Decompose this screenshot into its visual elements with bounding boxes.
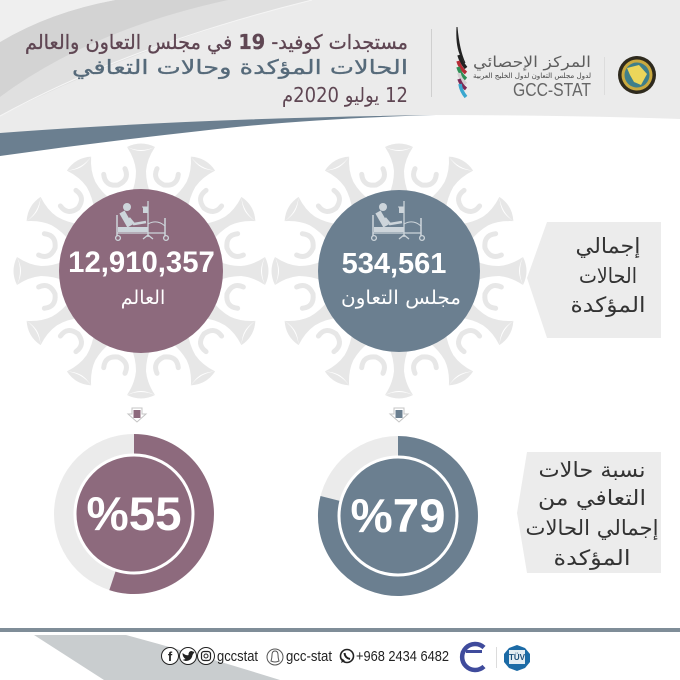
logo subtitle: لدول مجلس التعاون لدول الخليج العربية bbox=[473, 72, 591, 80]
panel: total confirmed cases, GCC bbox=[318, 190, 480, 352]
footer badge divider bbox=[496, 647, 497, 668]
header blue swoosh bbox=[0, 115, 436, 156]
logo GCC-STAT: GCC-STAT bbox=[513, 80, 591, 100]
world percentage: %55 bbox=[86, 488, 182, 541]
panel: recovery rate label bbox=[517, 452, 661, 573]
icon: facebook: f bbox=[168, 649, 173, 664]
icon: hospital bed bbox=[372, 201, 424, 240]
label line 3: إجمالي الحالات bbox=[526, 516, 658, 541]
panel: total confirmed cases, world bbox=[59, 189, 223, 353]
phone number: +968 2434 6482 bbox=[356, 648, 449, 665]
virus background: world bbox=[14, 144, 268, 398]
footer swoosh bbox=[34, 635, 280, 680]
icon: TUV badge bbox=[504, 645, 530, 671]
header background bbox=[0, 0, 680, 134]
handle: gcc-stat: gcc-stat bbox=[286, 648, 333, 665]
icon: snapchat bbox=[267, 649, 283, 665]
GCC total number: 534,561 bbox=[342, 248, 446, 280]
label line 4: المؤكدة bbox=[554, 546, 630, 570]
GCC percentage: %79 bbox=[350, 490, 446, 543]
footer contacts bbox=[162, 648, 449, 665]
footer rule bbox=[0, 628, 680, 632]
icon: twitter bbox=[180, 648, 196, 664]
icon: certification badge bbox=[462, 644, 484, 670]
panel: total confirmed label bbox=[527, 222, 661, 338]
title date: 12 يوليو 2020م bbox=[282, 83, 408, 107]
icon: instagram bbox=[198, 648, 214, 664]
handle: gccstat: gccstat bbox=[217, 648, 259, 665]
logo ribbon bbox=[457, 27, 466, 97]
label line 2: الحالات bbox=[579, 264, 637, 288]
virus background: GCC bbox=[272, 144, 526, 398]
icon: hospital bed bbox=[116, 201, 168, 240]
icon: TUV badge: TÜV bbox=[509, 653, 526, 662]
logo arabic name: المركز الإحصائي bbox=[473, 53, 591, 72]
icon: GCC emblem bbox=[618, 56, 656, 94]
donut: GCC recovery bbox=[318, 436, 478, 596]
donut: world recovery bbox=[54, 434, 214, 594]
icon: whatsapp bbox=[340, 650, 354, 663]
label line 3: المؤكدة bbox=[570, 293, 646, 317]
arrow: GCC bbox=[390, 408, 408, 422]
logo text bbox=[473, 53, 591, 100]
title line 1: مستجدات كوفيد- 19 في مجلس التعاون والعالم bbox=[25, 30, 408, 55]
logo divider bbox=[604, 57, 605, 95]
world label: العالم bbox=[121, 287, 165, 309]
label line 1: نسبة حالات bbox=[538, 458, 646, 482]
title text bbox=[25, 30, 408, 107]
header divider bbox=[431, 29, 432, 97]
GCC label: مجلس التعاون bbox=[341, 287, 461, 309]
icon: facebook bbox=[162, 648, 178, 664]
arrow: world bbox=[128, 408, 146, 422]
title line 2: الحالات المؤكدة وحالات التعافي bbox=[72, 55, 408, 80]
label line 1: إجمالي bbox=[576, 234, 640, 259]
world total number: 12,910,357 bbox=[68, 246, 215, 279]
label line 2: التعافي من bbox=[538, 486, 646, 510]
